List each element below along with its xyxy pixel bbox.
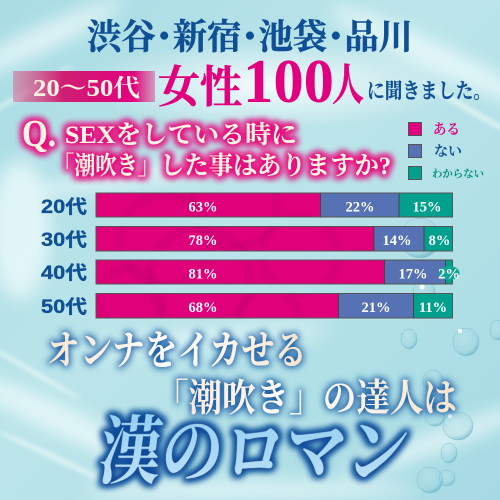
percentage labels: 2% xyxy=(438,266,460,282)
row: 50代: 50代 xyxy=(41,297,87,318)
row: 20代 xyxy=(41,193,452,218)
percentage labels: 81% xyxy=(188,266,218,282)
heading: 100 women xyxy=(158,48,491,116)
question: した事はありますか? xyxy=(160,152,391,180)
headline: line 1: オンナをイカせる xyxy=(47,328,307,373)
bar chart xyxy=(41,192,460,318)
percentage labels xyxy=(188,200,460,316)
row: 30代: 30代 xyxy=(41,230,87,251)
percentage labels: 63% xyxy=(188,200,218,216)
row: 50代 xyxy=(41,293,452,318)
bubbles xyxy=(400,218,500,493)
badge: age range: 20〜50代 xyxy=(33,75,140,102)
percentage labels: 17% xyxy=(398,266,428,282)
percentage labels: 8% xyxy=(429,233,450,249)
headline: main: 漢のロマン xyxy=(95,412,413,494)
legend xyxy=(408,122,484,180)
row: 20代: 20代 xyxy=(41,197,87,218)
heading: 100 women: 女性 xyxy=(158,63,242,112)
question: SEXをしている時に xyxy=(65,121,297,149)
heading: 100 women: 100 xyxy=(243,48,334,116)
row: 30代 xyxy=(41,226,452,251)
badge: age range xyxy=(13,71,155,102)
headline: line 2: 「潮吹き」の達人は xyxy=(155,378,457,420)
heading: 100 women: 人 xyxy=(332,61,364,110)
question: Q. xyxy=(22,113,56,155)
row: 40代 xyxy=(41,260,452,284)
legend: ある xyxy=(433,122,460,138)
row: 40代: 40代 xyxy=(41,263,87,284)
legend: ない xyxy=(434,144,462,160)
title: locations: 渋谷･新宿･池袋･品川 xyxy=(87,18,413,57)
percentage labels: 78% xyxy=(188,233,218,249)
legend: わからない xyxy=(432,168,484,180)
percentage labels: 22% xyxy=(346,200,374,216)
percentage labels: 68% xyxy=(188,300,218,316)
percentage labels: 21% xyxy=(362,300,390,316)
percentage labels: 15% xyxy=(412,200,442,216)
percentage labels: 11% xyxy=(419,300,447,316)
question xyxy=(22,113,391,180)
percentage labels: 14% xyxy=(382,233,412,249)
question: 「潮吹き」 xyxy=(53,152,159,180)
